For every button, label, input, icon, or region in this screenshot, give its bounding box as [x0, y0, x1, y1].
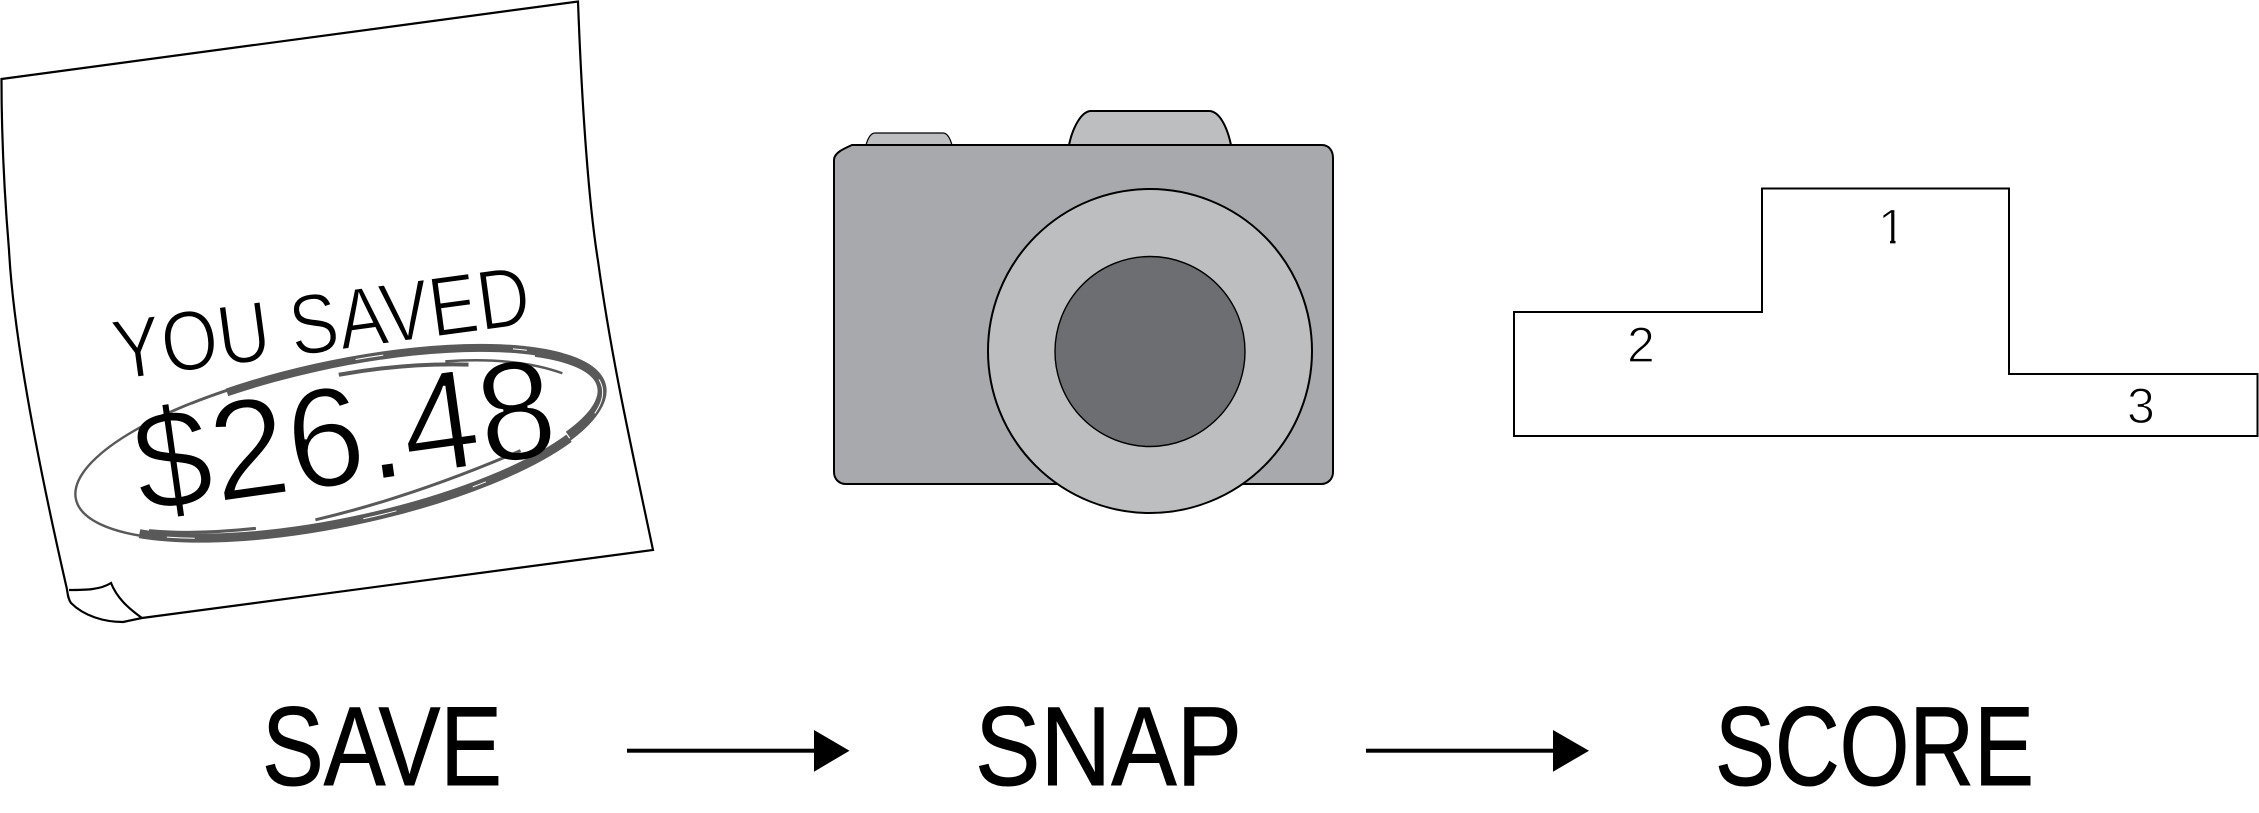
- icon: camera shutter button: [866, 133, 952, 145]
- text: podium second place: 2: [1627, 317, 1655, 373]
- icon: curled paper note: [2, 2, 653, 622]
- icon: camera lens glass: [1055, 256, 1245, 446]
- text: saved amount: $26.48: [123, 327, 565, 544]
- arrow: save to snap: [627, 730, 850, 772]
- icon: camera body: [834, 145, 1333, 484]
- heading: snap: SNAP: [975, 684, 1242, 809]
- scribbled circle around amount: [59, 308, 621, 578]
- text: you saved: YOU SAVED: [107, 248, 536, 399]
- heading: score: SCORE: [1715, 684, 2034, 809]
- text: podium third place: 3: [2127, 378, 2155, 434]
- icon: podium outline: [1514, 188, 2258, 436]
- panel: save receipt note: [2, 2, 653, 622]
- panel: score podium: [1514, 188, 2258, 436]
- arrow: snap to score: [1366, 730, 1589, 772]
- heading: save: SAVE: [262, 684, 502, 809]
- icon: camera viewfinder hump: [1069, 111, 1231, 145]
- text: podium first place: 1: [1878, 199, 1906, 255]
- panel: snap camera: [834, 111, 1333, 513]
- icon: camera lens ring: [988, 189, 1312, 513]
